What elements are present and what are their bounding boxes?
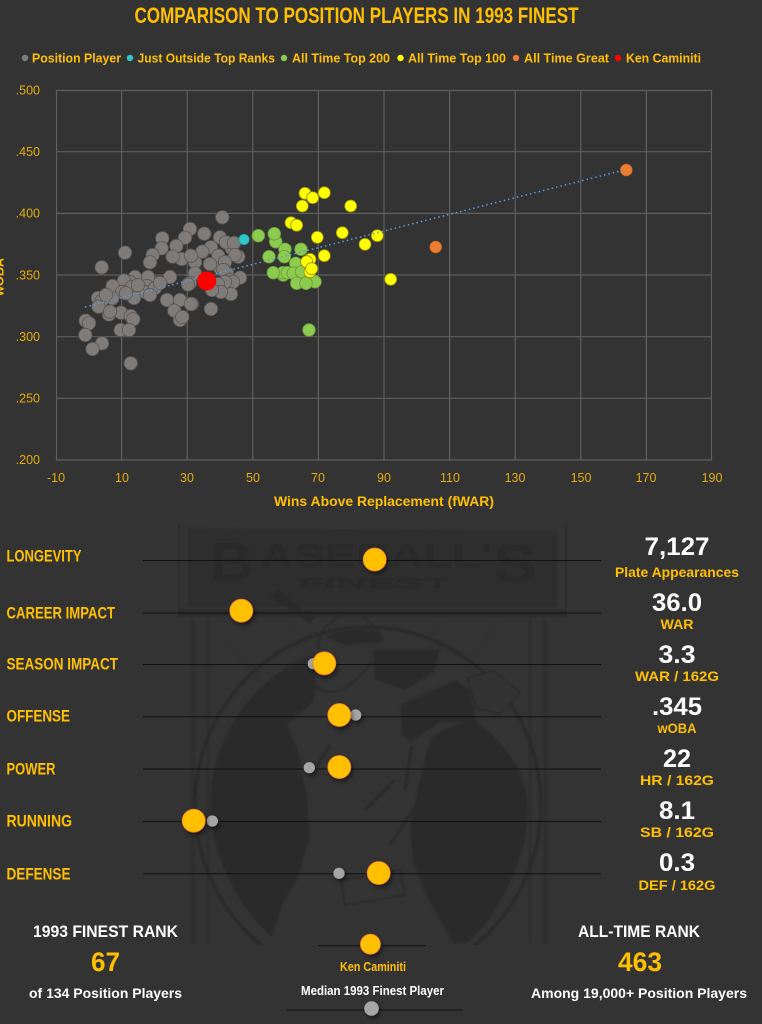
x axis labels: 70 (311, 471, 325, 485)
stat: def per 162 games: 0.3 (659, 849, 695, 877)
longevity row (6, 548, 601, 571)
x axis title: Wins Above Replacement (fWAR) (274, 494, 494, 509)
stat: plate appearances (615, 533, 739, 580)
all time top 100 points (285, 187, 397, 285)
x axis labels: 150 (571, 471, 591, 485)
legend: Just Outside Top Ranks (138, 50, 275, 66)
key: Ken Caminiti (340, 960, 406, 974)
1993 finest rank: 1993 FINEST RANK (33, 922, 179, 941)
y axis labels: .300 (16, 330, 40, 344)
all-time rank: ALL-TIME RANK (578, 922, 701, 941)
y axis labels (16, 84, 40, 467)
scatter chart (0, 84, 722, 509)
stat: woba (652, 693, 702, 736)
offense row (6, 704, 601, 726)
stat: sb per 162 games: 8.1 (659, 797, 695, 825)
stat: woba: wOBA (657, 721, 697, 736)
stat: war per 162 games: 3.3 (658, 641, 696, 669)
x axis labels: 110 (440, 471, 460, 485)
all-time rank: 463 (618, 947, 662, 977)
x axis labels: 130 (505, 471, 525, 485)
career impact row: CAREER IMPACT (6, 604, 115, 622)
x axis labels: -10 (47, 471, 65, 485)
running row: RUNNING (6, 813, 72, 831)
y axis labels: .400 (16, 206, 40, 220)
Ken Caminiti point (197, 272, 216, 290)
x axis labels: 50 (246, 471, 260, 485)
x axis labels: 190 (702, 471, 722, 485)
key (286, 931, 462, 1016)
legend: All Time Top 100 (408, 50, 506, 66)
1993 finest rank (29, 922, 182, 1001)
x axis labels: 170 (636, 471, 656, 485)
y axis labels: .500 (16, 84, 40, 98)
1993 finest rank: of 134 Position Players (29, 985, 182, 1001)
power row (6, 756, 601, 778)
banner (178, 543, 567, 616)
y axis labels: .250 (16, 392, 40, 406)
defense row: DEFENSE (6, 865, 70, 883)
season impact row: SEASON IMPACT (6, 655, 118, 673)
stat: war per 162 games (635, 641, 719, 684)
background card image: Baseball's Finest (178, 543, 567, 945)
defense row (6, 862, 601, 884)
banner: S (493, 534, 537, 594)
legend (22, 50, 701, 66)
trend line (85, 170, 626, 307)
sun rays (225, 620, 500, 690)
y axis labels: .450 (16, 145, 40, 159)
just outside top ranks point (239, 234, 249, 245)
right stats (615, 533, 739, 893)
x axis labels (47, 471, 722, 485)
y axis labels: .350 (16, 268, 40, 282)
slider rows (6, 548, 601, 884)
oval dark lobes (210, 655, 316, 937)
all time top 200 points (252, 227, 321, 336)
y axis labels: .200 (16, 453, 40, 467)
stat: hr per 162 games: HR / 162G (640, 773, 714, 788)
stat: plate appearances: Plate Appearances (615, 565, 739, 580)
1993 finest rank: 67 (91, 947, 120, 977)
position player points (79, 211, 247, 370)
title: COMPARISON TO POSITION PLAYERS IN 1993 FINEST (134, 3, 579, 28)
running row (6, 809, 601, 832)
stat: war (652, 589, 702, 632)
stat: def per 162 games (638, 849, 716, 893)
stat: woba: .345 (652, 693, 702, 721)
oval ring (194, 626, 542, 945)
all-time rank: Among 19,000+ Position Players (531, 985, 747, 1001)
all time great points (430, 164, 632, 253)
legend: Position Player (32, 50, 121, 66)
offense row: OFFENSE (6, 708, 70, 726)
stat: war per 162 games: WAR / 162G (635, 669, 719, 684)
all-time rank (531, 922, 747, 1001)
stat: sb per 162 games: SB / 162G (640, 825, 714, 840)
stat: hr per 162 games: 22 (663, 745, 691, 773)
stat: war: WAR (660, 617, 694, 632)
x axis labels: 30 (180, 471, 194, 485)
legend: All Time Top 200 (292, 50, 390, 66)
power row: POWER (6, 760, 56, 778)
card frame columns (193, 616, 545, 945)
x axis labels: 90 (377, 471, 391, 485)
stat: plate appearances: 7,127 (644, 533, 710, 561)
career impact row (6, 599, 601, 622)
x axis labels: 10 (115, 471, 129, 485)
banner: FINEST (298, 575, 450, 592)
legend: Ken Caminiti (626, 50, 701, 66)
stat: war: 36.0 (652, 589, 702, 617)
stat: sb per 162 games (640, 797, 714, 840)
banner: ASEBALL' (260, 537, 492, 574)
player figure (288, 607, 520, 905)
banner: B (210, 532, 254, 592)
longevity row: LONGEVITY (6, 548, 82, 566)
key: Median 1993 Finest Player (301, 984, 444, 998)
stat: def per 162 games: DEF / 162G (638, 878, 716, 893)
legend: All Time Great (524, 50, 610, 66)
season impact row (6, 652, 601, 675)
stat: hr per 162 games (640, 745, 714, 788)
